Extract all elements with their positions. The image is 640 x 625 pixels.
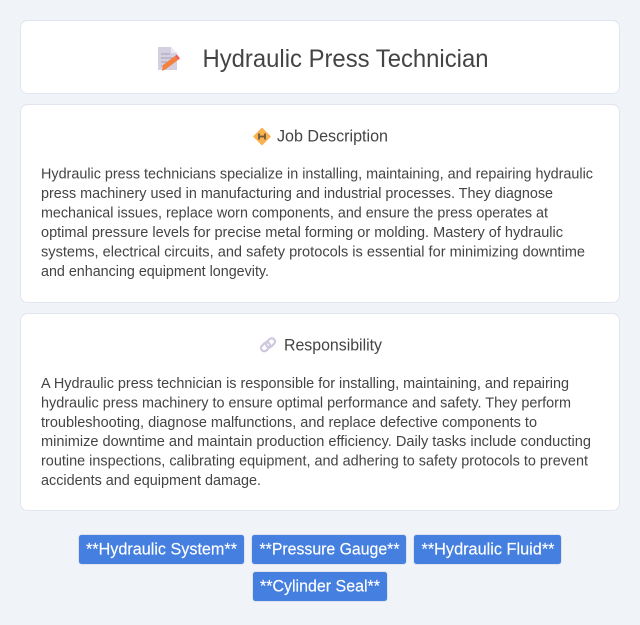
icon: chain link	[260, 337, 276, 353]
tag: hydraulic fluid: **Hydraulic Fluid**	[422, 540, 555, 558]
tag: hydraulic system	[78, 534, 244, 564]
responsibility paragraph: accidents and equipment damage.	[41, 473, 261, 489]
job description paragraph: systems, electrical circuits, and safety protocols is essential for minimizing downtime	[41, 244, 585, 260]
title text: Hydraulic Press Technician	[202, 45, 488, 73]
job description paragraph: and enhancing equipment longevity.	[41, 264, 269, 280]
responsibility paragraph: hydraulic press machinery to ensure optimal performance and safety. They perform	[41, 396, 571, 412]
responsibility paragraph: A Hydraulic press technician is responsible for installing, maintaining, and repairing	[41, 376, 569, 392]
job description paragraph: optimal pressure levels for precise metal forming or molding. Mastery of hydraulic	[41, 225, 563, 241]
panel: title	[20, 20, 620, 94]
tag: hydraulic fluid	[414, 534, 562, 564]
heading: responsibility: Responsibility	[284, 336, 383, 354]
tag: cylinder seal	[252, 572, 388, 602]
panel: job description	[20, 104, 620, 302]
responsibility paragraph	[41, 376, 591, 489]
panel: responsibility	[20, 314, 620, 510]
icon: document with pencil	[158, 47, 180, 71]
responsibility paragraph: routine inspections, calibrating equipment, and adhering to safety protocols to prevent	[41, 454, 588, 470]
heading: job description: Job Description	[277, 128, 388, 146]
tag: pressure gauge: **Pressure Gauge**	[260, 540, 400, 558]
icon: diamond road sign	[254, 128, 270, 144]
job description paragraph	[41, 166, 593, 280]
job description paragraph: Hydraulic press technicians specialize in installing, maintaining, and repairing hydraulic	[41, 166, 593, 182]
responsibility paragraph: minimize downtime and maintain production efficiency. Daily tasks include conducting	[41, 434, 591, 450]
job description paragraph: mechanical issues, replace worn components, and ensure the press operates at	[41, 206, 548, 222]
tag: pressure gauge	[252, 534, 406, 564]
tag: cylinder seal: **Cylinder Seal**	[260, 578, 381, 596]
job description paragraph: press machinery used in manufacturing and industrial processes. They diagnose	[41, 186, 553, 202]
responsibility paragraph: troubleshooting, diagnose malfunctions, and replace defective components to	[41, 415, 537, 431]
tag: hydraulic system: **Hydraulic System**	[86, 540, 238, 558]
